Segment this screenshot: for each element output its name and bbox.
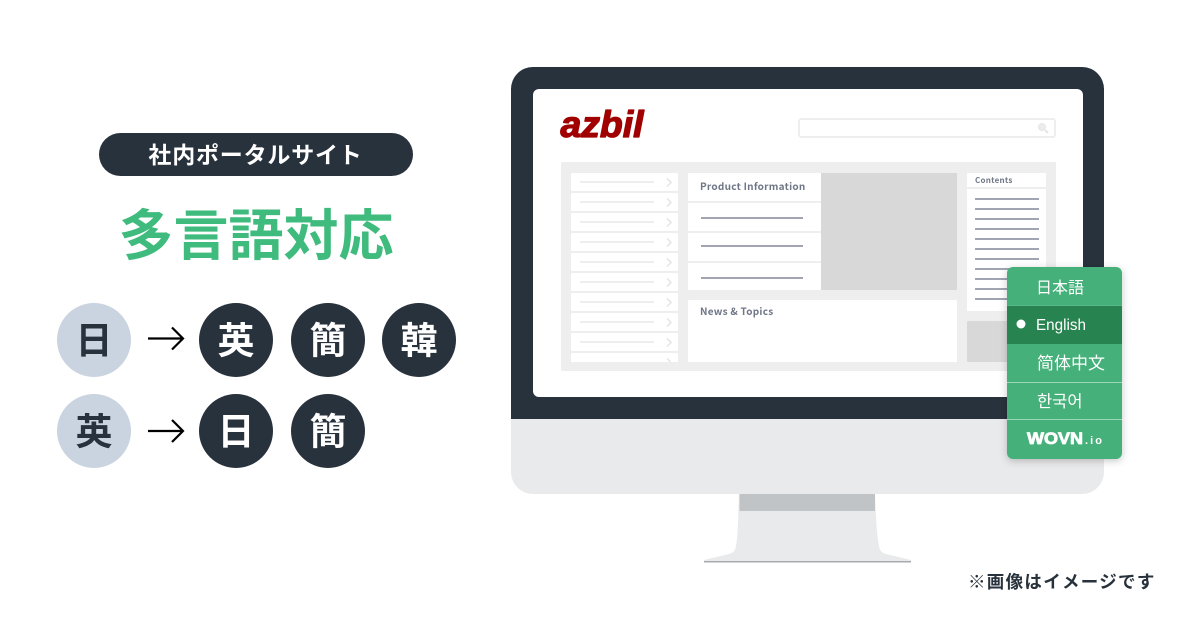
target language: 韓: 韓 [400,310,438,364]
image placeholder [821,173,957,290]
panel: Product Information: Product Information [700,178,806,193]
panel: Contents [967,173,1046,311]
option: 한국어: 한국어 [1037,388,1083,412]
badge: 社内ポータルサイト [99,133,413,176]
target language: 簡 [291,394,365,468]
target language: 簡 [291,303,365,377]
source language: 日 [57,303,131,377]
target language: 日: 日 [218,402,254,456]
source language: 英 [57,394,131,468]
panel: News & Topics: News & Topics [700,303,773,318]
sidebar menu [571,173,678,362]
logo: WOVN.io: WOVN [1027,430,1083,448]
gray box [967,321,1046,362]
arrow [148,328,183,350]
language dropdown [1007,267,1122,459]
footnote: ※画像はイメージです [968,569,1156,594]
search box [799,119,1055,137]
arrow [148,420,183,442]
option: English (selected): English [1036,317,1086,334]
screen [533,89,1083,397]
target language: 韓 [382,303,456,377]
option: English (selected) [1016,317,1086,334]
monitor body [511,67,1104,494]
logo: azbil: azbil [560,104,644,145]
panel: Contents: Contents [975,175,1013,186]
language row: English to Japanese, Simplified Chinese [57,394,365,468]
target language: 英 [199,303,273,377]
source language: 日: 日 [76,310,112,364]
target language: 簡: 簡 [310,402,346,456]
target language: 簡: 簡 [310,310,346,364]
option: 简体中文: 简体中文 [1037,349,1105,374]
logo: WOVN.io [1027,430,1102,448]
source language: 英: 英 [76,402,112,456]
badge: 社内ポータルサイト: 社内ポータルサイト [148,136,363,170]
option: 日本語: 日本語 [1036,274,1084,298]
target language: 日 [199,394,273,468]
monitor stand [704,494,911,562]
content panel [561,162,1056,371]
logo: WOVN.io: .io [1085,435,1102,447]
panel: Product Information [688,173,821,290]
language row: Japanese to English, Simplified Chinese, Korean [57,303,456,377]
target language: 英: 英 [218,310,254,364]
panel: News & Topics [688,300,957,362]
title: 多言語対応: 多言語対応 [118,191,394,271]
